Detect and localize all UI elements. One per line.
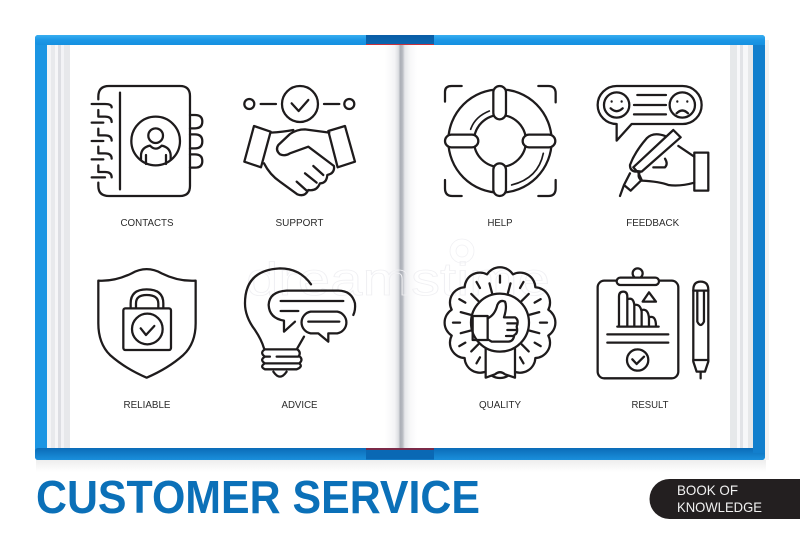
icon: feedback bubble and writing hand — [598, 86, 708, 196]
watermark: dreamstime — [246, 253, 550, 305]
label: help: HELP — [488, 217, 512, 229]
icon: shield with lock — [98, 269, 196, 378]
label: reliable: RELIABLE — [124, 399, 170, 411]
badge: book of knowledge: BOOK OF — [677, 482, 738, 498]
label: feedback: FEEDBACK — [626, 217, 679, 229]
label: support: SUPPORT — [276, 217, 324, 229]
item: result — [598, 268, 708, 411]
icon: lifebuoy — [445, 86, 556, 196]
open book pages — [47, 45, 753, 448]
icon: light bulb with speech bubbles — [245, 268, 355, 377]
icon: clipboard with chart and pen — [598, 268, 708, 378]
book cover — [35, 35, 769, 472]
badge: book of knowledge: KNOWLEDGE — [677, 499, 762, 515]
title: CUSTOMER SERVICE — [36, 471, 480, 523]
icon: rosette with thumb up — [445, 267, 555, 378]
label: contacts: CONTACTS — [120, 217, 174, 229]
label: advice: ADVICE — [282, 399, 318, 411]
item: support — [244, 86, 355, 229]
watermark — [246, 239, 550, 305]
item: quality — [445, 267, 555, 411]
item: feedback — [598, 86, 708, 229]
item: help — [445, 86, 556, 229]
item: reliable — [98, 269, 196, 411]
label: result: RESULT — [632, 399, 669, 411]
badge: book of knowledge — [650, 479, 800, 519]
icon: address book — [92, 86, 202, 196]
item: contacts — [92, 86, 202, 229]
label: quality: QUALITY — [479, 399, 521, 411]
icon: handshake with check — [244, 86, 355, 195]
item: advice — [245, 268, 355, 411]
